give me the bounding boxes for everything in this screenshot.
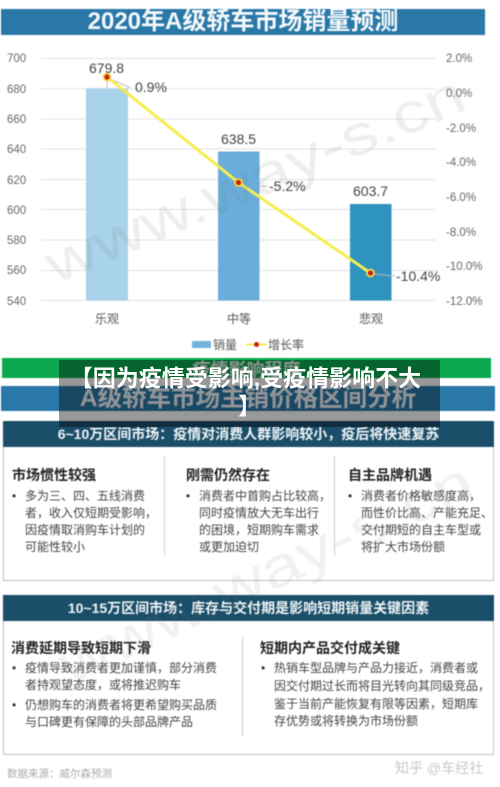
column: market inertia: [12, 466, 157, 554]
data source: 数据来源：威尔森预测: [7, 768, 112, 780]
column: delayed consumption: 疫情导致消费者更加谨慎，部分消费: [25, 661, 217, 675]
column: market inertia: 者，收入仅短期受影响，: [25, 506, 157, 520]
title overlay: [59, 360, 440, 427]
bar and line chart: [6, 52, 483, 352]
panel heading: [3, 421, 494, 447]
left axis labels: 560: [7, 265, 26, 277]
right axis labels: 0.0%: [446, 88, 472, 100]
left axis labels: 600: [7, 205, 26, 217]
column: delivery: 存优势或将转换为市场份额: [274, 714, 418, 728]
panel heading: 10~15万区间市场：库存与交付期是影响短期销量关键因素: [68, 600, 429, 616]
column: rigid demand: 同时疫情放大无车出行: [199, 506, 319, 520]
column: market inertia: 市场惯性较强: [12, 467, 96, 483]
title overlay: 】: [238, 393, 261, 419]
column: market inertia: 多为三、四、五线消费: [25, 489, 145, 503]
value labels: 603.7: [353, 183, 388, 199]
site watermarks: www.way-s.cn: [34, 62, 474, 296]
left axis labels: 620: [7, 175, 26, 187]
panel heading: 6~10万区间市场：疫情对消费人群影响较小，疫后将快速复苏: [58, 426, 439, 442]
left axis labels: 700: [7, 53, 26, 65]
bars: [86, 88, 392, 300]
column: delivery: [260, 640, 490, 728]
column: domestic brands: 自主品牌机遇: [348, 467, 432, 483]
right axis labels: -2.0%: [446, 123, 476, 135]
value labels: 638.5: [221, 131, 256, 147]
left axis labels: 660: [7, 114, 26, 126]
left axis labels: [7, 53, 26, 308]
column: delayed consumption: •: [12, 698, 16, 712]
title bar: [1, 9, 485, 35]
column: market inertia: •: [12, 489, 16, 503]
green banner: [2, 358, 491, 378]
category labels: 中等: [227, 311, 251, 326]
right axis labels: 2.0%: [446, 53, 472, 65]
left axis labels: 640: [7, 144, 26, 156]
column: domestic brands: 而性价比高、产能充足、: [361, 506, 493, 520]
column: rigid demand: 的困境，短期购车需求: [199, 523, 319, 537]
category labels: 乐观: [95, 312, 119, 326]
category labels: 悲观: [359, 311, 383, 326]
growth rate line: [104, 74, 374, 276]
panel: 6-10 万 market: [3, 421, 494, 581]
column: domestic brands: 消费者价格敏感度高，: [361, 489, 481, 503]
right axis labels: -6.0%: [446, 192, 476, 204]
column: delivery: 热销车型品牌与产品力接近，消费者或: [274, 661, 478, 675]
legend: [192, 337, 304, 352]
column: rigid demand: [186, 467, 331, 554]
column: market inertia: 可能性较小: [25, 540, 85, 554]
column: delivery: 鉴于当前产能恢复有限等因素，短期库: [274, 697, 478, 711]
value labels: -10.4%: [396, 268, 440, 284]
column: domestic brands: 交付期短的自主车型或: [361, 523, 481, 537]
value labels: 0.9%: [135, 79, 167, 95]
column: delivery: •: [261, 661, 265, 675]
right axis labels: -10.0%: [446, 261, 482, 273]
title overlay: 【因为疫情受影响,受疫情影响不大: [70, 365, 421, 391]
value labels: 679.8: [89, 60, 124, 76]
right axis labels: -4.0%: [446, 157, 476, 169]
left axis labels: 580: [7, 235, 26, 247]
column: domestic brands: •: [348, 489, 352, 503]
column: delayed consumption: 者持观望态度，或将推迟购车: [25, 678, 181, 692]
column: domestic brands: [348, 466, 493, 554]
value labels: -5.2%: [269, 178, 306, 194]
value labels: [89, 60, 440, 284]
legend: 增长率: [268, 337, 304, 352]
left axis labels: 540: [7, 296, 26, 308]
column: delivery: 短期内产品交付成关键: [260, 640, 400, 656]
column: rigid demand: 消费者中首购占比较高，: [199, 489, 331, 503]
column: market inertia: 因疫情取消购车计划的: [25, 523, 145, 537]
column: delayed consumption: •: [12, 661, 16, 675]
right axis labels: -8.0%: [446, 227, 476, 239]
left axis labels: 680: [7, 84, 26, 96]
column: delayed consumption: 仍想购车的消费者将更希望购买品质: [25, 698, 217, 712]
panel: 10-15 万 market: [3, 595, 494, 755]
column: delivery: 因交付期过长而将目光转向其同级竞品，: [274, 679, 490, 693]
column: rigid demand: 刚需仍然存在: [186, 467, 270, 483]
site watermarks: www.way-s.cn: [47, 449, 483, 697]
column: domestic brands: 将扩大市场份额: [361, 540, 445, 554]
legend: 销量: [213, 338, 237, 352]
column: delayed consumption: [11, 640, 217, 729]
blue banner: A级轿车市场主销价格区间分析: [80, 385, 416, 412]
leader lines: [107, 77, 395, 276]
column: delayed consumption: 消费延期导致短期下滑: [11, 640, 151, 656]
column: delayed consumption: 与口碑更有保障的头部品牌产品: [25, 715, 193, 729]
column: rigid demand: •: [186, 489, 190, 503]
panel heading: [3, 595, 494, 621]
right axis labels: -12.0%: [446, 296, 482, 308]
right axis labels: [446, 53, 482, 308]
zhihu watermark: 知乎 @车经社: [395, 760, 483, 776]
column: rigid demand: 或更加迫切: [199, 540, 259, 554]
title bar: 2020年A级轿车市场销量预测: [88, 8, 398, 35]
blue banner: [1, 386, 495, 411]
category labels: [95, 311, 383, 326]
